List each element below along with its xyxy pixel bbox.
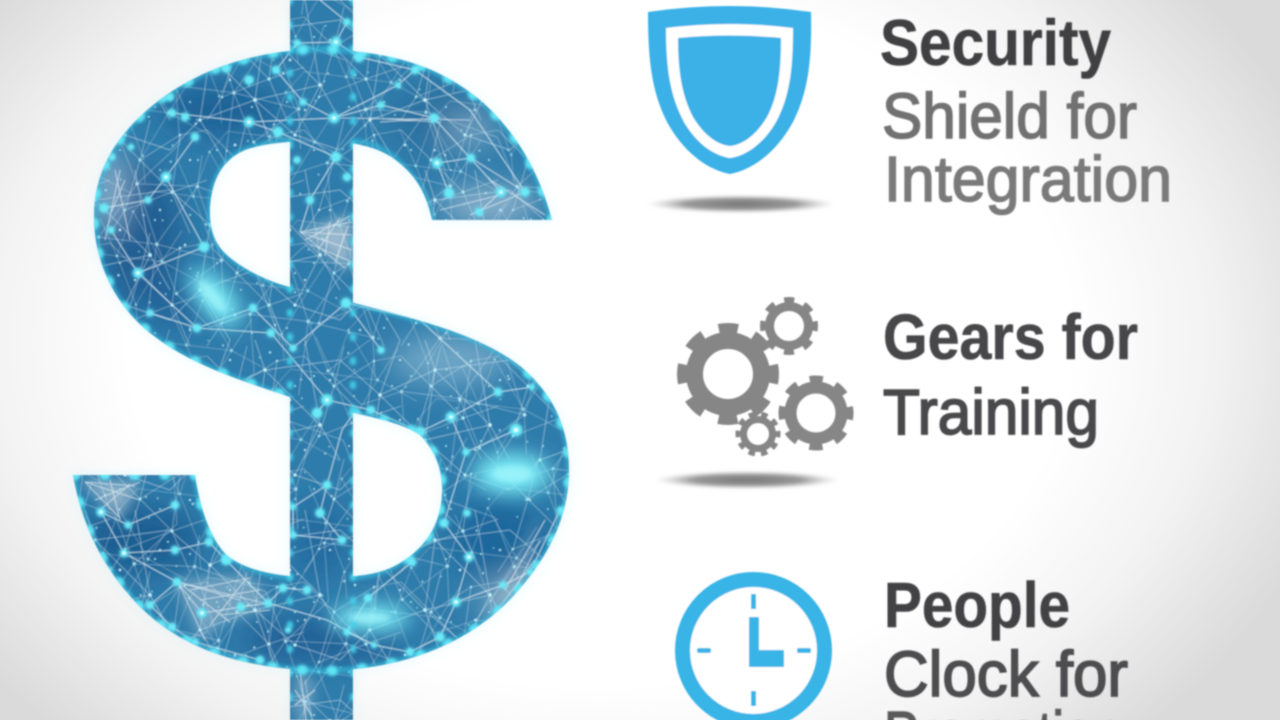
heading: People Clock for Promotion: Clock for bbox=[884, 638, 1128, 710]
icon: clock bbox=[682, 580, 824, 720]
dark and light mottling bbox=[80, 85, 560, 660]
glow clusters bbox=[181, 262, 550, 631]
dollar sign with network texture bbox=[72, 0, 572, 720]
top small gear bbox=[763, 300, 815, 352]
heading: Security, Shield for Integration bbox=[880, 6, 1172, 215]
shield shadow bbox=[647, 195, 835, 213]
heading: People Clock for Promotion: People bbox=[884, 569, 1070, 641]
bottom tiny gear bbox=[738, 414, 778, 454]
gears shadow bbox=[655, 471, 839, 489]
bright network nodes bbox=[96, 18, 563, 664]
heading: Security, Shield for Integration: Integration bbox=[884, 143, 1172, 215]
edge lights bbox=[73, 0, 569, 720]
heading: People Clock for Promotion bbox=[884, 569, 1128, 720]
heading: Security, Shield for Integration: Security bbox=[880, 6, 1111, 79]
connecting lines bbox=[101, 0, 560, 660]
node halos bbox=[96, 18, 563, 664]
icon: gears bbox=[682, 300, 850, 454]
heading: Gears for Training: Training bbox=[883, 376, 1099, 448]
icon: shield bbox=[648, 6, 811, 174]
repeating network of lines and nodes bbox=[84, 0, 566, 720]
fan line bundles inside grey patches bbox=[85, 118, 545, 720]
heading: Gears for Training: Gears for bbox=[883, 301, 1138, 373]
dollar outer glow bbox=[73, 0, 569, 720]
right gear bbox=[782, 380, 850, 446]
large gear bbox=[682, 328, 774, 420]
grey soft patches bbox=[82, 215, 540, 720]
node highlights bbox=[99, 40, 518, 615]
heading: Security, Shield for Integration: Shield for bbox=[882, 80, 1137, 152]
heading: Gears for Training bbox=[883, 301, 1138, 448]
